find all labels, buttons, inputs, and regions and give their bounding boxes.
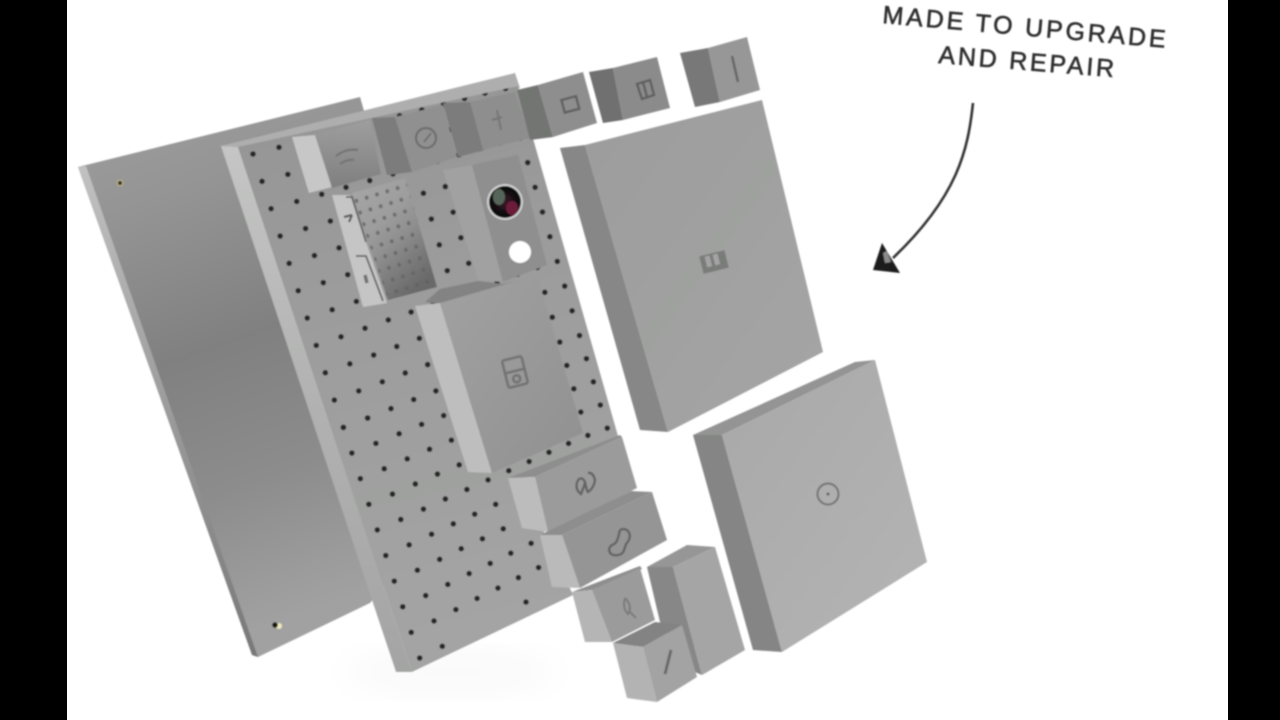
- tall module: [647, 545, 745, 675]
- battery module: [560, 100, 823, 432]
- callout line 2: AND REPAIR: [938, 41, 1115, 83]
- hand-drawn arrow: [873, 103, 973, 273]
- wifi module: [292, 120, 381, 193]
- back plate: [78, 97, 470, 657]
- exploded phone illustration: [78, 37, 927, 702]
- sync drawer module: [540, 491, 667, 588]
- speaker grille module: [352, 178, 437, 300]
- map icon module: [589, 57, 670, 123]
- shadow above lock module: [425, 276, 537, 304]
- lens: [487, 184, 523, 220]
- antenna drawer module: [508, 435, 637, 532]
- top right bar module: [680, 37, 760, 107]
- side button modules: [332, 195, 387, 307]
- callout line 1: MADE TO UPGRADE: [881, 1, 1167, 54]
- leaf module: [572, 566, 655, 642]
- right black bar: [1228, 0, 1280, 720]
- lock icon: [502, 356, 528, 388]
- lock module: [415, 275, 583, 473]
- screen module: [693, 360, 927, 652]
- bluetooth module: [443, 92, 530, 157]
- gauge module: [372, 105, 457, 175]
- callout text: [881, 1, 1167, 83]
- battery icon: [699, 250, 729, 274]
- floor shadow: [340, 654, 560, 690]
- perforated board: [221, 73, 642, 672]
- camera icon module: [517, 72, 597, 140]
- board holes: [253, 88, 642, 658]
- flash: [509, 241, 531, 263]
- pen module: [613, 622, 697, 702]
- camera module: [443, 155, 547, 282]
- left black bar: [0, 0, 67, 720]
